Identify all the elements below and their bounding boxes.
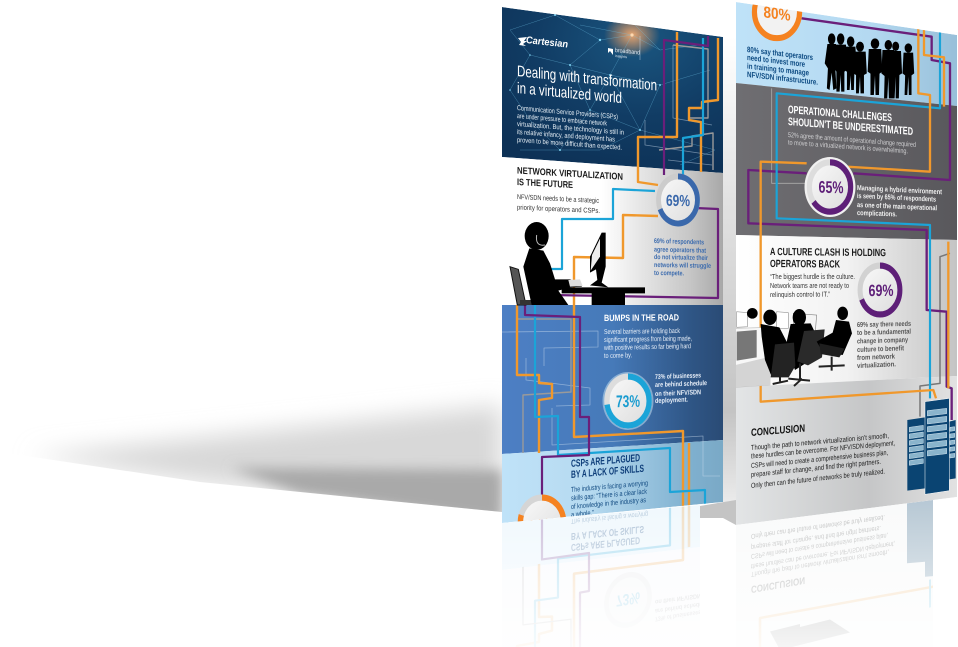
text block: 73% of businesses: deployment. (655, 397, 688, 405)
grey connector lines (516, 45, 713, 453)
text block: 69% say: to be a fundamental (857, 329, 911, 337)
heading: network virtualization: NETWORK VIRTUALIZATION (517, 166, 623, 183)
text block: barriers: with positive results so far being hard (603, 343, 691, 352)
heading: culture clash: OPERATORS BACK (770, 258, 840, 271)
text block: 80% say: NFV/SDN infrastructure. (747, 70, 818, 87)
icon: office team at desks (736, 307, 852, 387)
text block: conclusion: CSPs will need to create a comprehensive business plan, (751, 448, 888, 470)
text block: quote: “The biggest hurdle is the culture. (770, 272, 855, 281)
text block: conclusion (751, 431, 895, 490)
text block: hybrid environment (857, 183, 942, 218)
intro text block: its relative infancy, and deployment has (517, 129, 615, 144)
text block: 80% say (747, 45, 818, 87)
text block: 69% of respondents: to compete. (654, 270, 684, 277)
panel: network virtualization background (502, 157, 723, 305)
stat ring: 69% (659, 176, 697, 224)
heading: bumps in the road: BUMPS IN THE ROAD (604, 312, 679, 323)
panel: conclusion background (736, 376, 957, 525)
text block: quote: Network teams are not ready to (770, 281, 849, 290)
network constellation decoration (509, 13, 715, 165)
text block: 73% of businesses: 73% of businesses (655, 372, 701, 381)
panel: left page reflection: are behind schedule (655, 600, 707, 614)
text block: conclusion: prepare staff for change, and find the right partners. (751, 457, 881, 479)
heading: network virtualization: IS THE FUTURE (517, 177, 573, 191)
panel: right infographic page (736, 0, 957, 525)
heading: lack of skills: BY A LACK OF SKILLS (571, 463, 644, 481)
panel: left page reflection: 73% of businesses (655, 608, 701, 622)
title: Dealing with transformation (517, 63, 657, 95)
text block: 69% say: virtualization. (857, 361, 896, 370)
text block: 73% of businesses (655, 372, 707, 405)
intro text block (517, 105, 624, 152)
panel: left infographic page (502, 7, 723, 546)
text block: 69% say: 69% say there needs (857, 321, 911, 329)
intro text block: are under pressure to embrace network (517, 113, 607, 128)
heading: lack of skills (571, 454, 644, 478)
intro text block: proven to be more difficult than expected. (517, 137, 622, 152)
panel: right page reflection: Though the path to network virtualization isn't smooth, (751, 548, 889, 577)
text block: strategic priority: priority for operators and CSPs. (517, 205, 600, 215)
panel: right page reflection: CSPs will need to create a comprehensive business plan, (751, 531, 888, 559)
text block: skills gap: The industry is facing a worrying (571, 478, 648, 494)
text block: 69% say: from network (857, 353, 895, 362)
panel: left page reflection (502, 505, 700, 647)
title (518, 66, 656, 103)
text block: 69% of respondents: do not virtualize their (654, 254, 708, 262)
heading: operational challenges: OPERATIONAL CHALLENGES (788, 104, 892, 124)
text block: hybrid environment: complications. (857, 208, 897, 218)
text block: barriers: significant progress from being made, (604, 336, 692, 344)
panel: lack of skills background (502, 440, 723, 523)
faint connector outlines (502, 36, 720, 476)
icon: server racks (907, 398, 956, 494)
panel: operational challenges background (736, 83, 957, 240)
heading: culture clash (770, 246, 886, 271)
logo: Cartesian: Cartesian (526, 35, 568, 51)
text block: quote (770, 272, 855, 299)
text block: barriers (603, 328, 692, 360)
text block: 52% agree: 52% agree the amount of operational change required (788, 132, 916, 149)
text block: 73% of businesses: are behind schedule (655, 380, 707, 389)
text block: skills gap: a whole.” (571, 508, 594, 519)
icon: crowd of people (825, 33, 914, 98)
panel: left page reflection: CSPs ARE PLAGUED (571, 534, 640, 552)
text block: 80% say: 80% say that operators (747, 45, 813, 62)
text block: skills gap: of knowledge in the industry as (571, 495, 646, 511)
panel: right page reflection: CONCLUSION (751, 574, 805, 594)
text block: 69% say: change in company (857, 337, 908, 345)
panel: right page reflection: Only then can the future of networks be truly realized. (751, 513, 885, 539)
text block: conclusion: these hurdles can be overcome. For NFV/SDN deployment, (751, 438, 895, 460)
text block: 69% of respondents (654, 238, 711, 277)
orange connector lines (517, 32, 718, 510)
heading: lack of skills: CSPs ARE PLAGUED (571, 452, 640, 470)
panel: bumps in the road background (502, 305, 723, 454)
text block: 73% of businesses: on their NFV/SDN (655, 389, 701, 398)
text block: conclusion: Only then can the future of networks be truly realized. (751, 467, 885, 490)
stat ring: 73%: 73% (616, 392, 640, 411)
shadow between the two pages (700, 37, 736, 525)
panel: culture clash background (736, 235, 957, 387)
logo: broadband: broadband (615, 48, 640, 56)
heading: operational challenges (788, 104, 913, 138)
heading: network virtualization (518, 167, 622, 188)
panel: right page reflection (751, 500, 933, 647)
panel: left page reflection: The industry is facing a worrying (571, 510, 648, 524)
text block: 80% say: in training to manage (747, 62, 809, 78)
panel: left page reflection: BY A LACK OF SKILLS (571, 523, 644, 541)
stat ring: 69% purple (860, 266, 900, 314)
stat ring: 80% cut off by page edge: 80% (528, 515, 556, 536)
stat ring: 80% cut off by page edge (518, 494, 566, 522)
logo: broadband (608, 48, 640, 59)
text block: 52% agree: to move to a virtualized network is overwhelming. (788, 140, 908, 155)
intro text block: Communication Service Providers (CSPs) (517, 105, 618, 121)
purple connector lines (525, 36, 718, 497)
panel: left page reflection: 73% (616, 588, 640, 610)
panel: header background (502, 7, 723, 173)
text block: 80% say: need to invest more (747, 53, 805, 69)
intro text block: virtualization. But, the technology is still in (517, 121, 624, 137)
text block: 69% of respondents: agree operators that (654, 247, 707, 255)
text block: 52% agree (788, 132, 916, 155)
text block: skills gap: skills gap: “There is a clear lack (571, 487, 647, 502)
icon: person at computer (510, 222, 645, 305)
heading: culture clash: A CULTURE CLASH IS HOLDING (770, 246, 886, 259)
heading: conclusion: CONCLUSION (751, 423, 805, 439)
connector lines (748, 18, 952, 420)
text block: 69% say (857, 321, 911, 370)
panel: right page reflection: prepare staff for change, and find the right partners. (751, 524, 881, 550)
shadow cast on the floor (30, 405, 502, 522)
text block: skills gap (571, 480, 648, 516)
text block: conclusion: Though the path to network virtualization isn't smooth, (751, 431, 889, 452)
stat ring: 65%: 65% (818, 178, 844, 197)
panel: left page reflection: on their NFV/SDN (655, 592, 701, 605)
text block: barriers: Several barriers are holding back (604, 328, 680, 336)
text block: 69% of respondents: networks will struggle (654, 262, 711, 270)
stat ring: 80% (754, 0, 800, 38)
text block: quote: relinquish control to IT.” (770, 290, 830, 299)
logo: Cartesian (518, 36, 568, 48)
panel: training background (736, 2, 957, 106)
text block: strategic priority: NFV/SDN needs to be a strategic (517, 194, 599, 205)
text block: barriers: to come by. (604, 352, 632, 360)
stat ring: 69%: 69% (666, 193, 690, 210)
text block: 69% of respondents: 69% of respondents (654, 238, 704, 246)
cyan connector lines (535, 38, 705, 505)
stat ring: 73% (602, 372, 654, 430)
text block: 69% say: culture to benefit (857, 345, 905, 354)
text block: hybrid environment: as one of the main operational (857, 200, 937, 212)
stat ring: 65% (804, 157, 856, 217)
stat ring: 80%: 80% (764, 3, 790, 25)
text block: strategic priority (517, 194, 600, 213)
title: in a virtualized world (517, 80, 622, 107)
panel: right page reflection: these hurdles can be overcome. For NFV/SDN deployment, (751, 540, 895, 569)
stat ring: 69% purple: 69% (868, 282, 894, 300)
logo: broadband: insights (615, 54, 627, 59)
